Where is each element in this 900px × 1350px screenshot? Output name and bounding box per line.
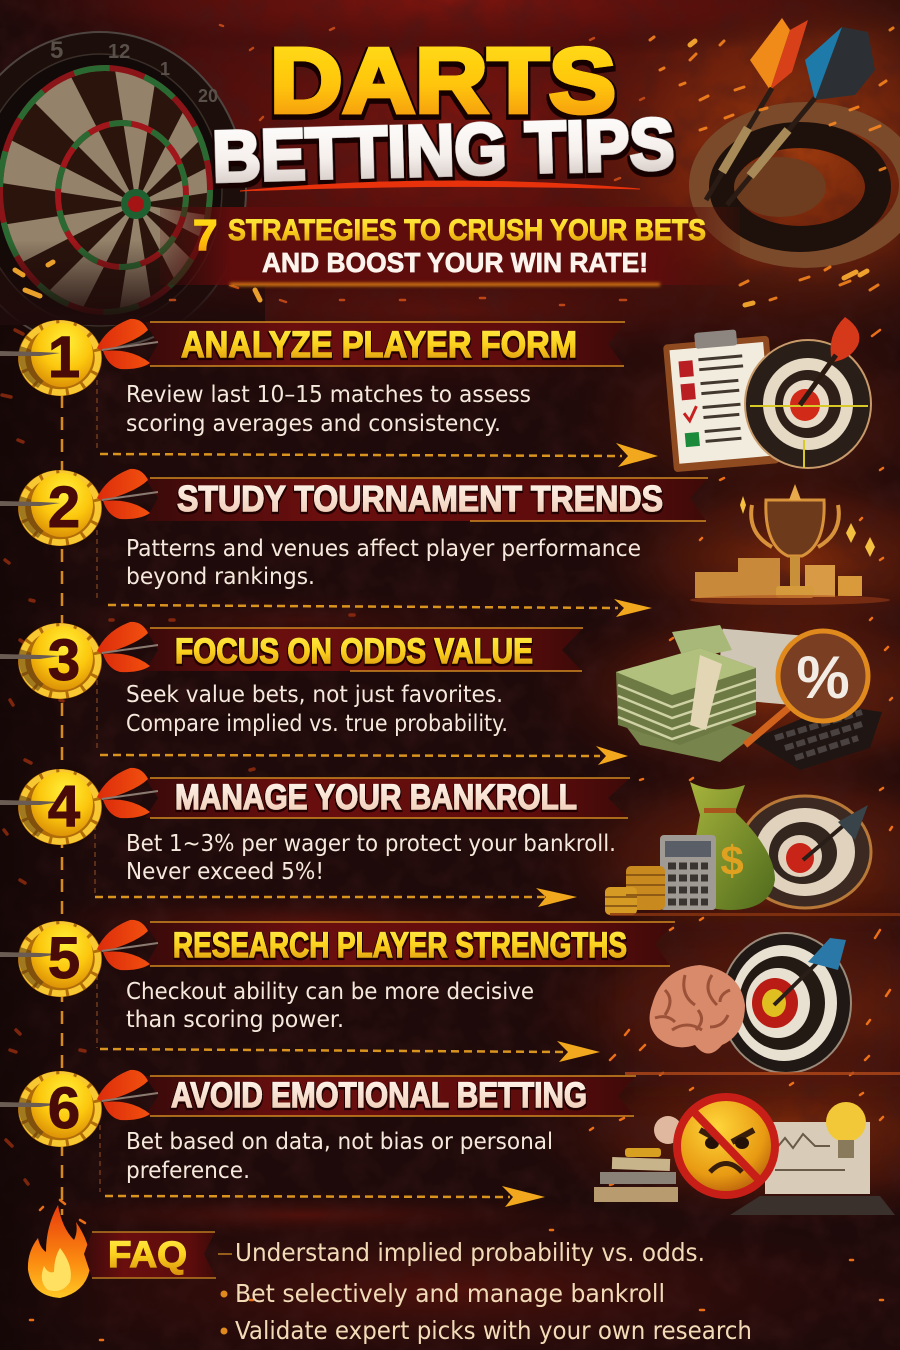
FAQ list: Bet selectively and manage bankroll <box>235 1279 665 1308</box>
target and darts, top right <box>700 18 900 257</box>
step 4 text: Never exceed 5%! <box>126 859 324 885</box>
step 5 text <box>126 979 534 1033</box>
step 6 text: Bet based on data, not bias or personal <box>126 1129 553 1155</box>
timeline dashed line <box>61 395 63 1215</box>
step 3 illustration: cash, magnifier, calculator <box>616 625 882 770</box>
step 2 arrow <box>108 599 652 617</box>
title: BETTING TIPS <box>211 105 675 197</box>
dartboard: 1 <box>160 59 170 79</box>
step 6 medal: 6 <box>48 1076 80 1141</box>
step 2 medal: 2 <box>48 475 80 540</box>
FAQ banner <box>84 1232 216 1278</box>
step 1 medal <box>0 319 158 396</box>
step 4 illustration: money bag, calculator, coins, target <box>605 782 900 916</box>
dartboard: 20 <box>198 86 218 106</box>
subtitle line 2: AND BOOST YOUR WIN RATE! <box>262 247 648 278</box>
step 3 text: Seek value bets, not just favorites. <box>126 682 503 708</box>
title <box>211 30 675 197</box>
step 3 text: Compare implied vs. true probability. <box>126 711 508 737</box>
step 2 banner: STUDY TOURNAMENT TRENDS <box>177 478 663 519</box>
title: DARTS <box>270 30 616 132</box>
step 3 illustration: cash, magnifier, calculator: % <box>796 644 850 711</box>
step 2 text: beyond rankings. <box>126 564 315 590</box>
step 1 medal: 1 <box>48 325 80 390</box>
step 4 text <box>126 831 616 885</box>
step 3 medal: 3 <box>48 628 80 693</box>
step 5 medal: 5 <box>48 926 80 991</box>
step 6 text <box>126 1129 553 1184</box>
step 6 medal <box>0 1070 158 1147</box>
step 2 medal <box>0 469 158 546</box>
step 4 banner: MANAGE YOUR BANKROLL <box>175 778 577 817</box>
subtitle line 1: STRATEGIES TO CRUSH YOUR BETS <box>228 214 706 247</box>
icon: orange dart <box>706 18 808 200</box>
step 1 text: scoring averages and consistency. <box>126 411 501 437</box>
dartboard: 5 <box>50 37 63 64</box>
step 3 text <box>126 682 508 737</box>
icon: flame <box>28 1205 90 1298</box>
step 3 arrow <box>100 746 628 765</box>
step 5 text: Checkout ability can be more decisive <box>126 979 534 1005</box>
subtitle number 7: 7 <box>193 211 217 260</box>
step 4 arrow <box>95 888 577 907</box>
subtitle banner <box>160 207 740 286</box>
step 5 medal <box>0 920 158 997</box>
FAQ list: Validate expert picks with your own research <box>235 1316 752 1345</box>
step 1 text: Review last 10–15 matches to assess <box>126 382 531 408</box>
step 2 text <box>126 536 641 590</box>
step 1 text <box>126 382 531 437</box>
step 2 text: Patterns and venues affect player performance <box>126 536 641 562</box>
step 6 text: preference. <box>126 1158 250 1184</box>
dartboard: 12 <box>108 41 130 63</box>
step 6 arrow <box>105 1186 545 1207</box>
dartboard <box>0 31 265 347</box>
FAQ list: Understand implied probability vs. odds. <box>235 1238 705 1267</box>
step 4 medal <box>0 768 158 845</box>
step 1 arrow <box>100 443 658 467</box>
step 5 arrow <box>100 1041 600 1062</box>
icon: blue dart <box>727 27 875 205</box>
step 3 banner: FOCUS ON ODDS VALUE <box>175 632 533 671</box>
step 2 <box>0 469 890 617</box>
step 1 illustration: clipboard and target <box>662 317 871 472</box>
step 3 <box>0 622 882 770</box>
step 4 illustration: money bag, calculator, coins, target: $ <box>720 837 744 884</box>
step 4 <box>0 768 900 916</box>
step 4 text: Bet 1~3% per wager to protect your bankroll. <box>126 831 616 857</box>
step 6 illustration: banned angry face, books, laptop, bulb <box>594 1097 895 1215</box>
step 6 banner: AVOID EMOTIONAL BETTING <box>171 1076 587 1115</box>
step 1 banner: ANALYZE PLAYER FORM <box>181 324 577 365</box>
step 3 medal <box>0 622 158 699</box>
step 2 illustration: trophy on podium <box>690 484 890 605</box>
step 4 medal: 4 <box>48 774 80 839</box>
FAQ banner: FAQ <box>108 1234 187 1275</box>
step 1 <box>0 317 871 472</box>
step 5 text: than scoring power. <box>126 1007 344 1033</box>
FAQ list <box>218 1238 752 1345</box>
step 5 <box>0 920 900 1075</box>
step 5 illustration: brain and target <box>625 933 900 1075</box>
step 5 banner: RESEARCH PLAYER STRENGTHS <box>173 926 627 965</box>
step 6 <box>0 1070 895 1215</box>
panel outlines <box>95 380 100 1192</box>
